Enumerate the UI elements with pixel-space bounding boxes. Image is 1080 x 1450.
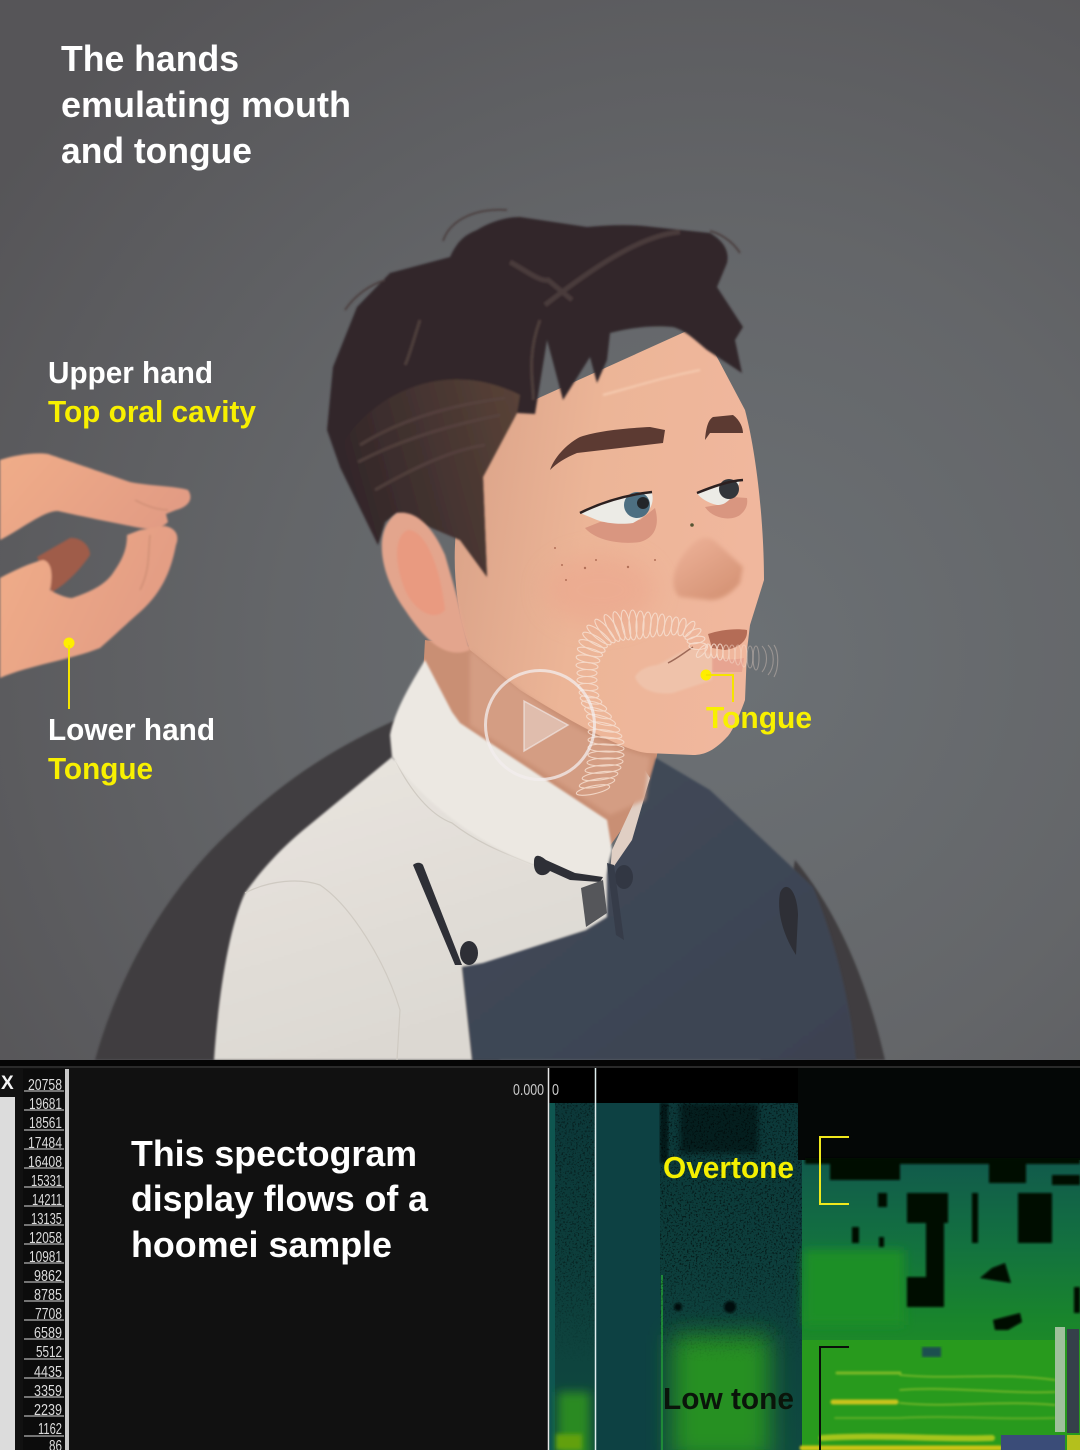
title: emulating mouth [61, 84, 351, 125]
title: The hands [61, 38, 239, 79]
left eye [580, 492, 657, 543]
frequency ruler: 18561 [29, 1115, 62, 1132]
time cursor and readout [513, 1068, 596, 1450]
ear [382, 513, 470, 653]
dark blue blotch [922, 1347, 941, 1357]
low tone bracket [820, 1347, 849, 1450]
spectrogram [513, 1068, 1080, 1450]
finger at mouth [635, 648, 712, 693]
overtone label: Overtone [663, 1150, 794, 1185]
play button [486, 670, 594, 780]
chair [95, 718, 885, 1060]
side strip with close button: X [1, 1073, 14, 1094]
neck shadow [470, 650, 650, 815]
time cursor and readout: 0 [552, 1082, 559, 1099]
side strip with close button [0, 1073, 15, 1450]
character illustration [95, 210, 885, 1060]
collar [390, 660, 612, 878]
right eye [697, 479, 747, 518]
tongue pointer [700, 670, 733, 702]
overtone bracket [820, 1137, 849, 1204]
collar inner strip [610, 770, 650, 872]
background [0, 0, 1080, 1062]
side hair [340, 379, 520, 577]
frequency ruler: 17484 [28, 1135, 62, 1152]
finger creases [135, 500, 168, 590]
frequency ruler: 19681 [29, 1096, 62, 1113]
low tone label: Low tone [663, 1381, 794, 1416]
frequency ruler: 6589 [34, 1325, 62, 1342]
frequency ruler: 16408 [28, 1154, 62, 1171]
hair wisps [345, 210, 740, 310]
jacket seams [245, 760, 534, 1060]
jacket [214, 757, 607, 1060]
lower hand label [48, 712, 215, 786]
frequency ruler: 13135 [31, 1211, 62, 1228]
scroll widgets [1055, 1327, 1065, 1432]
lower hand thumb [37, 538, 90, 592]
cheek blush and freckles [545, 523, 694, 625]
frequency ruler: 4435 [34, 1364, 62, 1381]
frequency ruler: 7708 [35, 1306, 62, 1323]
frequency ruler: 5512 [36, 1344, 62, 1361]
lower hand label: Tongue [48, 751, 153, 786]
forehead crease [603, 370, 700, 395]
dark blotches [674, 1301, 736, 1313]
frequency ruler: 20758 [28, 1077, 62, 1094]
frequency ruler: 14211 [32, 1192, 62, 1209]
spectrogram caption: This spectogram [131, 1133, 417, 1174]
time cursor and readout: 0.000 [513, 1082, 544, 1099]
spectrogram left section [549, 1103, 804, 1450]
lower hand pointer [64, 638, 74, 709]
spectrogram caption: hoomei sample [131, 1224, 392, 1265]
vest [462, 758, 856, 1060]
mouth [708, 629, 747, 650]
frequency ruler: 3359 [34, 1383, 62, 1400]
illustrated hands [0, 453, 190, 678]
frequency ruler: 2239 [34, 1402, 62, 1419]
upper hand label: Top oral cavity [48, 394, 257, 429]
black patches [798, 1068, 1080, 1160]
vest strap and toggle buttons [413, 856, 798, 965]
lower hand label: Lower hand [48, 712, 215, 747]
inner ear [397, 530, 445, 615]
frequency ruler [23, 1069, 69, 1450]
spectrogram caption: display flows of a [131, 1178, 429, 1219]
upper hand [0, 453, 190, 540]
nose [673, 538, 743, 600]
spectrogram caption [131, 1133, 429, 1265]
right eyebrow [705, 415, 743, 440]
neck [420, 640, 660, 850]
frequency ruler: 10981 [29, 1249, 62, 1266]
spectrogram right section [798, 1068, 1080, 1450]
upper hand label [48, 355, 257, 429]
frequency ruler: 1162 [38, 1421, 62, 1438]
frequency ruler: 8785 [34, 1287, 62, 1304]
title [61, 38, 351, 171]
hair loop [510, 232, 680, 305]
airflow coil [576, 610, 778, 797]
bottom panel background [0, 1060, 1080, 1450]
head [455, 325, 764, 755]
left eyebrow [550, 427, 665, 470]
hair [327, 210, 743, 577]
frequency ruler: 9862 [34, 1268, 62, 1285]
lower hand [0, 526, 177, 678]
harmonic bands [802, 1373, 1055, 1448]
title: and tongue [61, 130, 252, 171]
tongue label: Tongue [706, 700, 812, 735]
frequency ruler: 15331 [31, 1173, 62, 1190]
upper hand label: Upper hand [48, 355, 213, 390]
hair strands [358, 320, 540, 490]
frequency ruler: 12058 [29, 1230, 62, 1247]
